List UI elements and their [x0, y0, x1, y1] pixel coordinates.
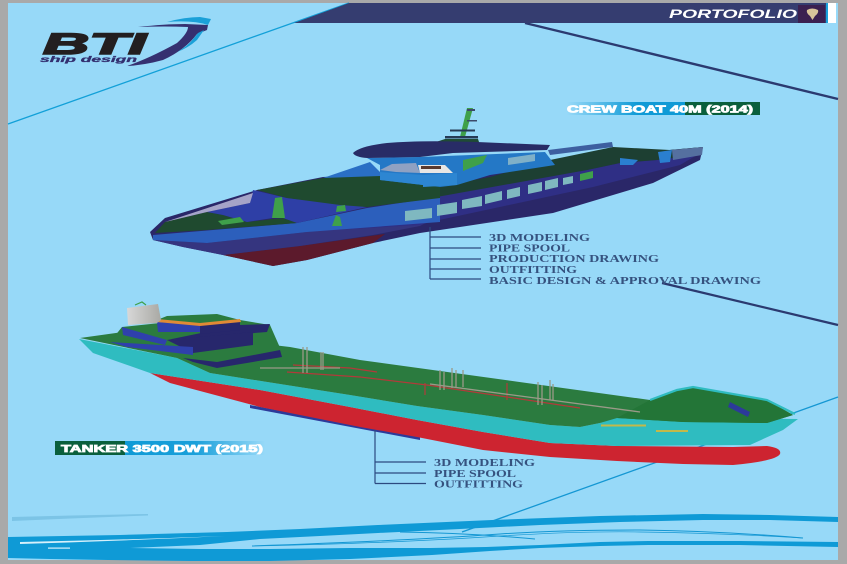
crew boat hull — [150, 147, 703, 266]
crew boat bracket — [430, 227, 481, 279]
crew boat cabin — [367, 152, 555, 187]
label: tanker title — [55, 441, 265, 455]
tanker funnel — [127, 304, 161, 325]
crew boat bridge windows — [380, 163, 420, 173]
tanker name — [601, 424, 688, 432]
ship: crew boat — [150, 108, 703, 266]
diagonal accent line: cyan upper — [8, 3, 349, 124]
crew boat hull shading — [153, 215, 440, 255]
tanker superstructure — [110, 302, 282, 368]
tanker scope text: PIPE SPOOL — [434, 469, 516, 480]
tanker bow rail — [650, 387, 795, 414]
logo wordmark: BTI — [43, 28, 147, 61]
diagonal accent line: navy upper — [525, 23, 838, 99]
crew boat scope text: 3D MODELING — [489, 233, 590, 244]
tanker bow hatch — [728, 402, 750, 417]
crew boat roof — [353, 141, 550, 158]
crew boat keel — [223, 234, 385, 266]
crew boat scope text: PIPE SPOOL — [489, 244, 570, 254]
crew boat lower foredeck — [155, 212, 297, 233]
callout: crew boat scope list — [430, 227, 761, 287]
tanker keel line — [250, 405, 420, 440]
diagonal accent line: cyan lower — [462, 397, 838, 532]
tanker teal hull — [79, 339, 798, 446]
header title: PORTOFOLIO — [669, 9, 797, 21]
crew boat cabin wedge — [323, 162, 380, 178]
tanker bracket — [375, 430, 426, 484]
crew boat upper foredeck — [257, 172, 440, 207]
header band — [294, 3, 836, 23]
crew boat bow windows — [165, 193, 253, 222]
crew boat blue strake — [153, 197, 440, 243]
crew boat green panels — [218, 197, 346, 226]
crew boat scope text: OUTFITTING — [489, 265, 577, 276]
callout: tanker scope list — [375, 430, 535, 490]
tanker deck piping — [287, 365, 580, 408]
logo: BTI ship design — [40, 17, 211, 66]
logo tagline: ship design — [40, 55, 137, 64]
label: crew boat title: CREW BOAT 40M (2014) — [567, 104, 753, 116]
tanker scope text: OUTFITTING — [434, 480, 523, 490]
tanker deck equipment — [260, 347, 640, 412]
crew boat side band — [300, 155, 697, 232]
tanker scope text — [434, 458, 535, 490]
icon: portfolio badge — [798, 5, 825, 23]
crew boat scope text: PRODUCTION DRAWING — [489, 254, 659, 265]
crew boat bulwark — [207, 190, 367, 223]
tanker bow deck — [617, 387, 793, 423]
ship: tanker — [79, 302, 798, 465]
diagonal accent line: navy lower — [662, 283, 838, 325]
crew boat rear deck — [400, 147, 703, 202]
crew boat scope text: BASIC DESIGN & APPROVAL DRAWING — [489, 276, 761, 287]
crew boat bridge front — [380, 172, 423, 185]
label: crew boat title — [567, 102, 760, 116]
crew boat green window — [463, 155, 487, 171]
label: tanker title: TANKER 3500 DWT (2015) — [61, 443, 263, 455]
decorative waves footer — [8, 514, 838, 561]
crew boat mast — [427, 108, 480, 145]
tanker scope text: 3D MODELING — [434, 458, 535, 469]
tanker deck — [80, 332, 793, 427]
crew boat rear structures — [548, 142, 613, 155]
crew boat scope text — [489, 233, 761, 287]
crew boat side windows — [405, 171, 593, 221]
logo swoosh — [127, 17, 211, 66]
tanker red hull — [150, 373, 780, 465]
